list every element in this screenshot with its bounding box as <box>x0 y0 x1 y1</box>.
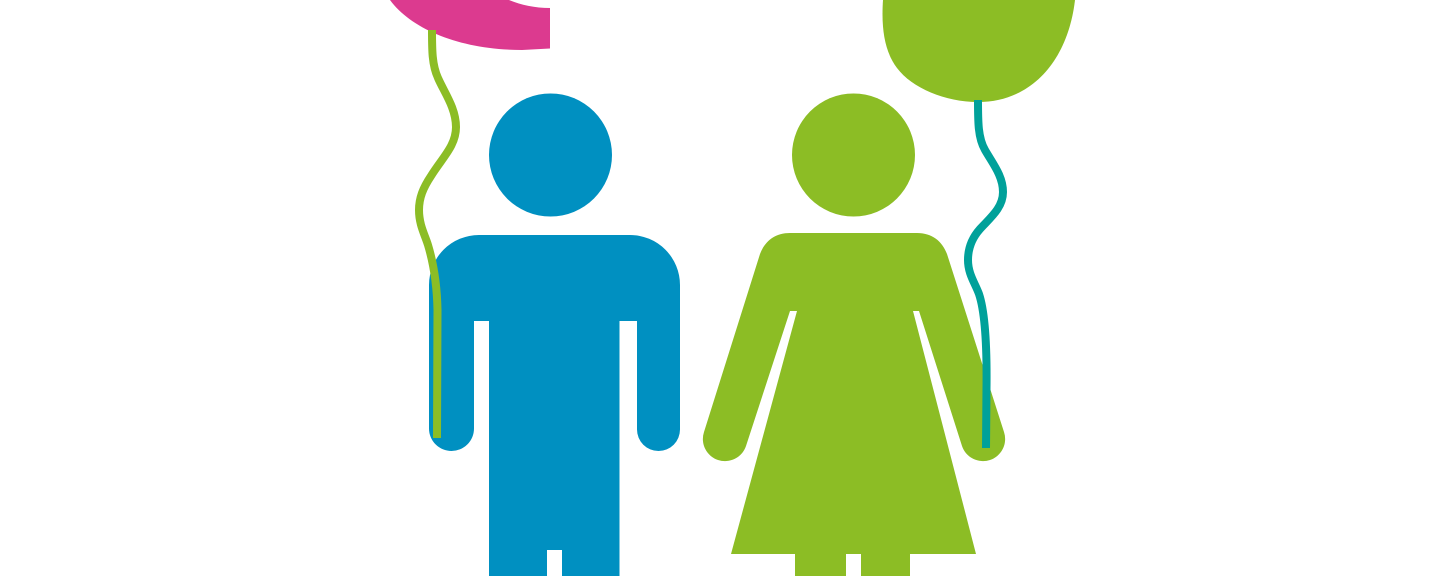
figure: man (blue) <box>429 94 680 576</box>
balloon string: green <box>419 30 456 438</box>
balloon: pink <box>390 0 550 50</box>
balloon string: teal <box>968 100 1003 448</box>
balloon: green <box>883 0 1075 102</box>
figure: woman (green) <box>703 94 1005 576</box>
